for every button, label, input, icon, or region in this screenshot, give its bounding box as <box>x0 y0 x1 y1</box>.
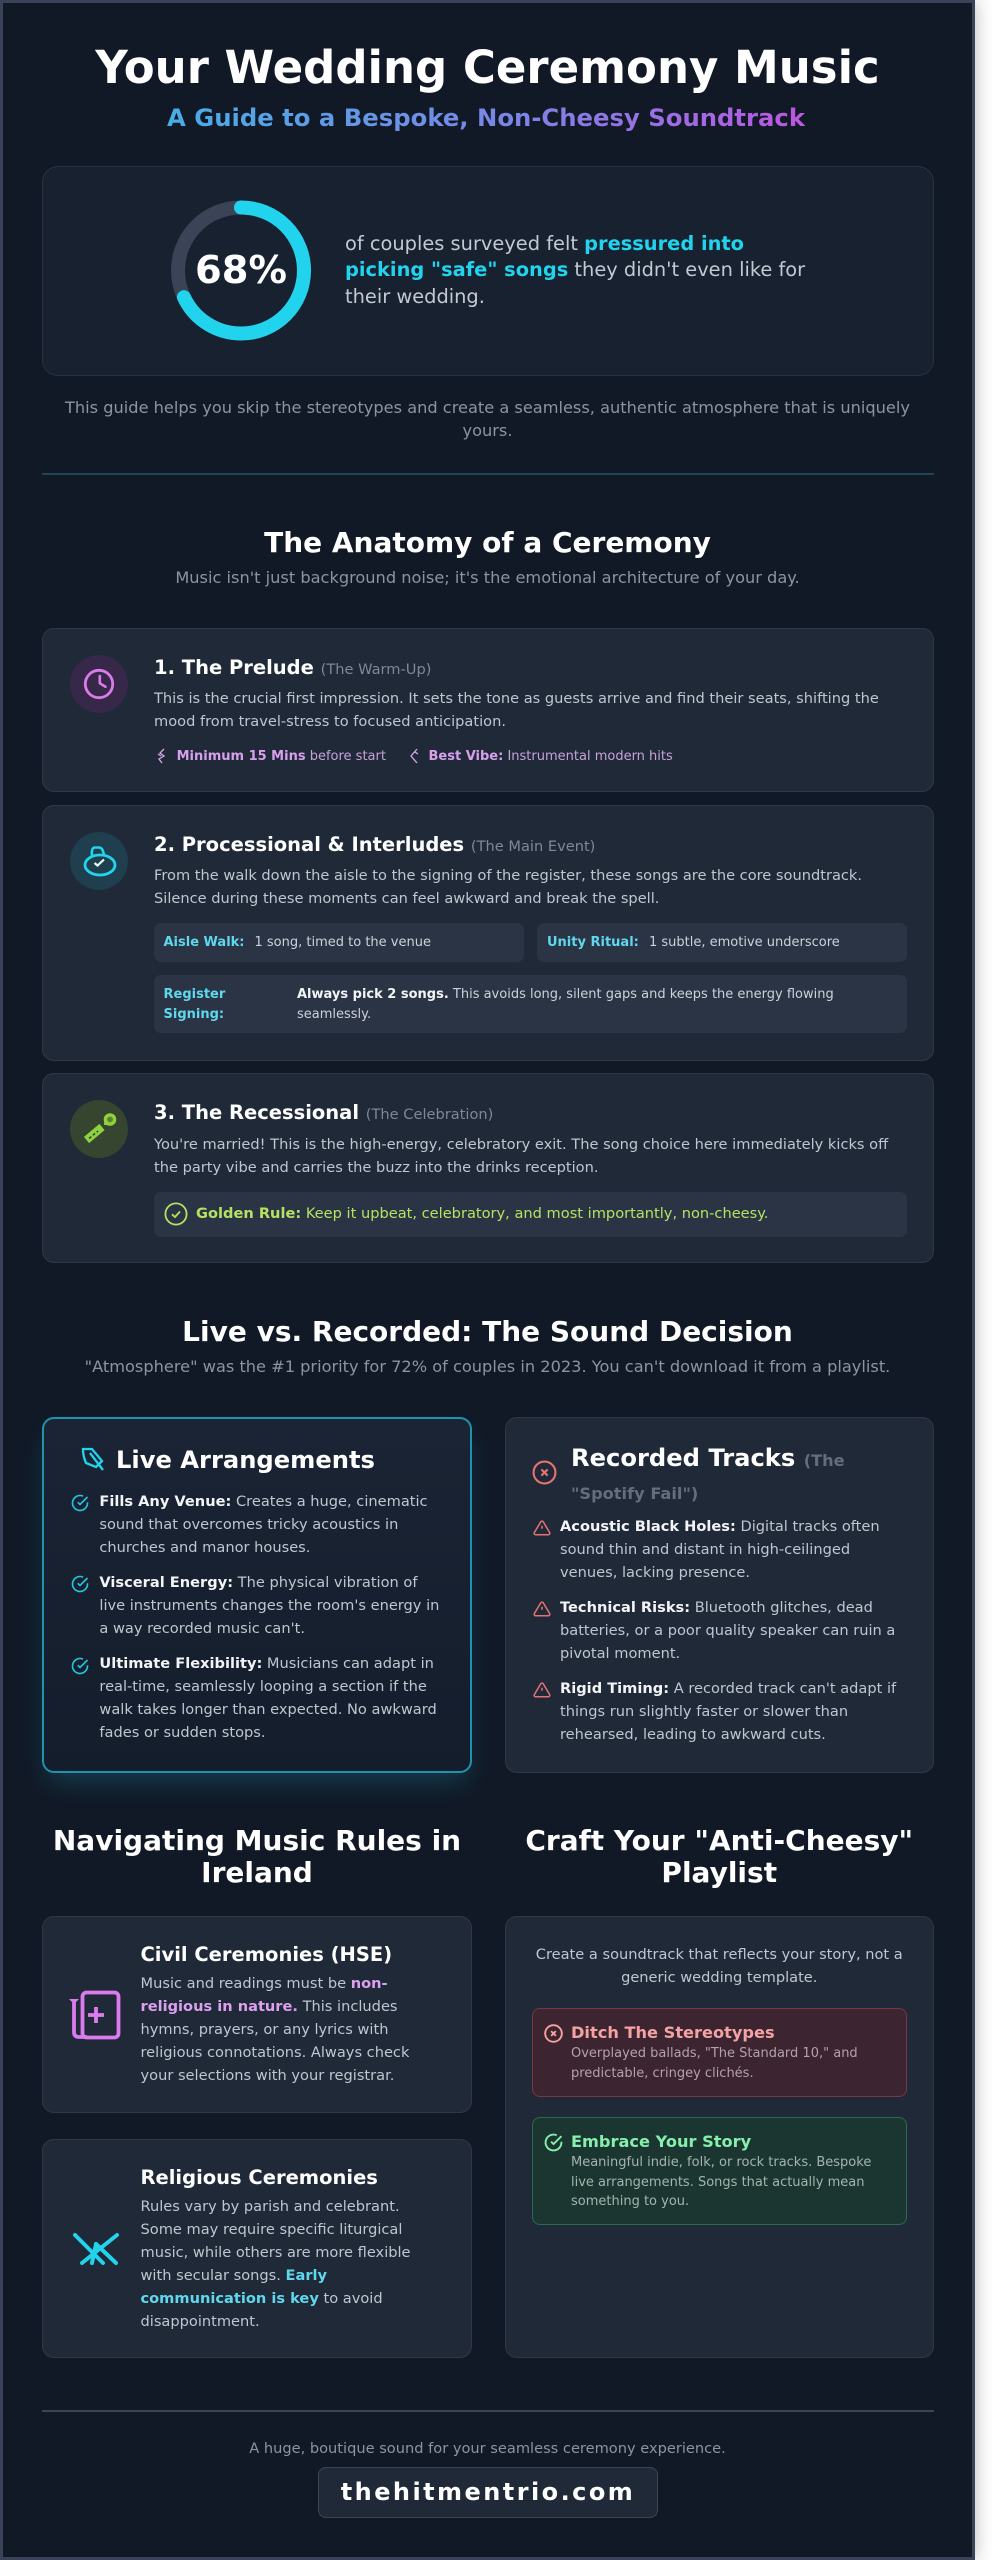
callout: aisle walk: 1 song, timed to the venue <box>254 935 431 950</box>
list item: ultimate flexibility: Ultimate Flexibility: Musicians can adapt in <box>99 1655 434 1672</box>
description: recessional: the party vibe and carries the buzz into the drinks reception. <box>154 1158 598 1176</box>
callout: ditch the stereotypes <box>532 2008 907 2097</box>
list item: ultimate flexibility: walk takes longer than expected. No awkward <box>99 1701 437 1718</box>
statistic text <box>345 232 806 308</box>
callout: golden rule <box>154 1192 906 1237</box>
panel: religious ceremonies <box>42 2139 472 2358</box>
callout: register signing <box>154 975 906 1033</box>
heading: live vs recorded: Live vs. Recorded: The Sound Decision <box>182 1315 793 1348</box>
callout: golden rule: Golden Rule: Keep it upbeat, celebratory, and most importantly, non-cheesy. <box>196 1205 768 1222</box>
list item: visceral energy: Visceral Energy: The physical vibration of <box>99 1574 418 1591</box>
description: religious ceremonies: with secular songs. Early <box>140 2267 327 2284</box>
description: civil ceremonies: your selections with your registrar. <box>140 2067 394 2084</box>
statistic text: of couples surveyed felt pressured into <box>345 232 744 254</box>
callout: unity ritual: 1 subtle, emotive underscore <box>649 935 840 950</box>
panel: anti-cheesy playlist <box>505 1916 934 2358</box>
list item: technical risks: pivotal moment. <box>560 1645 680 1662</box>
subheading: anatomy: Music isn't just background noise; it's the emotional architecture of your day. <box>175 568 800 587</box>
description: recessional: You're married! This is the high-energy, celebratory exit. The song choice here immediately kicks off <box>154 1136 888 1152</box>
panel: civil ceremonies <box>42 1916 472 2113</box>
description: civil ceremonies: hymns, prayers, or any lyrics with <box>140 2021 388 2038</box>
callout: embrace your story: Meaningful indie, folk, or rock tracks. Bespoke <box>571 2155 871 2170</box>
description: religious ceremonies: music, while others are more flexible <box>140 2244 411 2261</box>
heading: recessional: 3. The Recessional (The Celebration) <box>154 1100 493 1124</box>
meta: minimum time <box>158 748 386 764</box>
list item: visceral energy: live instruments changes the room's energy in <box>99 1597 439 1614</box>
list item: ultimate flexibility: fades or sudden stops. <box>99 1724 266 1741</box>
intro text: yours. <box>462 420 512 440</box>
description: processional: From the walk down the aisle to the signing of the register, these songs are the core soundtrack. <box>154 867 862 884</box>
callout: ditch the stereotypes: Ditch The Stereotypes <box>571 2023 775 2042</box>
heading: religious ceremonies: Religious Ceremonies <box>140 2166 378 2189</box>
title: Your Wedding Ceremony Music <box>95 41 880 94</box>
heading: recorded tracks <box>571 1444 845 1503</box>
callout: embrace your story: Embrace Your Story <box>571 2132 751 2151</box>
panel: live arrangements <box>42 1417 472 1773</box>
playlist intro: Create a soundtrack that reflects your story, not a <box>536 1946 903 1962</box>
panel: the prelude: Best Vibe: Instrumental modern hits <box>428 748 673 764</box>
list item: rigid timing: Rigid Timing: A recorded track can't adapt if <box>560 1680 896 1697</box>
list item: rigid timing: rehearsed, leading to awkward cuts. <box>560 1726 826 1743</box>
intro text <box>64 398 910 440</box>
callout: embrace your story <box>532 2117 907 2225</box>
list item: visceral energy <box>72 1574 439 1637</box>
list item: fills any venue: sound that overcomes tricky acoustics in <box>99 1516 398 1532</box>
panel: the prelude: Minimum 15 Mins before start <box>177 748 386 764</box>
footer website badge <box>318 2467 658 2518</box>
statistic text: their wedding. <box>345 285 485 308</box>
callout: ditch the stereotypes: predictable, cringey clichés. <box>571 2066 754 2081</box>
footer tagline: A huge, boutique sound for your seamless ceremony experience. <box>249 2440 726 2457</box>
playlist intro: generic wedding template. <box>621 1968 817 1986</box>
heading: music rules in ireland <box>53 1824 461 1889</box>
panel: the recessional <box>42 1073 934 1263</box>
description: religious ceremonies: Rules vary by parish and celebrant. <box>140 2198 400 2215</box>
list item: technical risks: Technical Risks: Bluetooth glitches, dead <box>560 1599 873 1616</box>
list item: rigid timing <box>533 1680 896 1743</box>
panel: the prelude <box>42 628 934 792</box>
panel: hero statistic <box>42 166 934 376</box>
list item: acoustic black holes <box>533 1518 880 1580</box>
list item: visceral energy: a way recorded music can't. <box>99 1620 305 1637</box>
list item: fills any venue: Fills Any Venue: Creates a huge, cinematic <box>99 1492 428 1510</box>
description: prelude: This is the crucial first impression. It sets the tone as guests arrive and find their seats, shifting the <box>154 690 879 707</box>
callout: embrace your story: live arrangements. Songs that actually mean <box>571 2175 864 2190</box>
heading: anti-cheesy playlist: Playlist <box>661 1856 777 1889</box>
description: recessional <box>154 1136 888 1176</box>
icon: stopwatch <box>70 832 128 890</box>
description: religious ceremonies <box>140 2198 411 2330</box>
statistic text: picking "safe" songs they didn't even like for <box>345 258 805 281</box>
heading: processional: 2. Processional & Interludes (The Main Event) <box>154 832 595 856</box>
callout: aisle walk: Aisle Walk: <box>164 935 245 950</box>
description: processional: Silence during these moments can feel awkward and break the spell. <box>154 890 659 907</box>
heading: music rules in ireland: Ireland <box>201 1856 313 1889</box>
callout: register signing: Register <box>164 987 225 1002</box>
description: prelude <box>154 690 879 730</box>
list item: acoustic black holes: venues, lacking presence. <box>560 1564 750 1580</box>
subheading: live vs recorded: "Atmosphere" was the #1 priority for 72% of couples in 2023. You can't download it from a playlist. <box>85 1357 890 1376</box>
icon: book with plus <box>69 1990 120 2040</box>
meta: best vibe <box>410 748 673 764</box>
icon: clock <box>70 655 128 713</box>
description: religious ceremonies: communication is key to avoid <box>140 2290 383 2307</box>
list item: fills any venue <box>72 1492 428 1556</box>
description: civil ceremonies: religious in nature. This includes <box>140 1998 398 2015</box>
callout: register signing: Always pick 2 songs. This avoids long, silent gaps and keeps the energy flowing <box>297 987 834 1002</box>
panel: processional and interludes <box>42 805 934 1061</box>
callout: register signing: Signing: <box>164 1006 224 1022</box>
description: civil ceremonies: Music and readings must be non- <box>140 1975 388 1992</box>
callout: aisle walk <box>154 923 524 962</box>
heading: anatomy: The Anatomy of a Ceremony <box>264 526 711 559</box>
heading: anti-cheesy playlist <box>525 1824 913 1889</box>
heading: recorded tracks: "Spotify Fail") <box>571 1484 698 1503</box>
subtitle: A Guide to a Bespoke, Non-Cheesy Soundtrack <box>167 103 805 132</box>
intro text: This guide helps you skip the stereotypes and create a seamless, authentic atmosphere that is uniquely <box>65 398 910 416</box>
heading: prelude: 1. The Prelude (The Warm-Up) <box>154 656 431 678</box>
description: civil ceremonies <box>140 1975 410 2084</box>
callout: register signing: seamlessly. <box>297 1006 371 1022</box>
heading: music rules in ireland: Navigating Music Rules in <box>53 1824 461 1857</box>
donut chart: 68% <box>171 200 311 340</box>
icon: microphone <box>70 1100 128 1158</box>
heading: anti-cheesy playlist: Craft Your "Anti-Cheesy" <box>525 1824 913 1857</box>
callout: unity ritual: Unity Ritual: <box>547 935 639 950</box>
footer website badge: thehitmentrio.com <box>341 2478 635 2506</box>
playlist intro <box>536 1946 903 1986</box>
icon: crossed lines <box>72 2232 120 2266</box>
donut chart: 68%: 68% <box>195 248 287 293</box>
description: processional <box>154 867 862 907</box>
list item: acoustic black holes: Acoustic Black Holes: Digital tracks often <box>560 1518 880 1534</box>
icon: feather <box>82 1448 104 1471</box>
list item: rigid timing: things run slightly faster or slower than <box>560 1703 848 1720</box>
callout: embrace your story: something to you. <box>571 2194 689 2209</box>
description: civil ceremonies: religious connotations. Always check <box>140 2044 409 2061</box>
list item: acoustic black holes: sound thin and distant in high-ceilinged <box>560 1540 850 1558</box>
callout: unity ritual <box>537 923 906 962</box>
callout: ditch the stereotypes: Overplayed ballads, "The Standard 10," and <box>571 2046 858 2061</box>
list item: ultimate flexibility <box>72 1655 437 1741</box>
description: prelude: mood from travel-stress to focused anticipation. <box>154 713 506 730</box>
heading: civil ceremonies: Civil Ceremonies (HSE) <box>140 1943 392 1966</box>
panel: recorded tracks <box>505 1417 934 1773</box>
description: religious ceremonies: Some may require specific liturgical <box>140 2221 402 2238</box>
list item: fills any venue: churches and manor houses. <box>99 1538 310 1556</box>
heading: recorded tracks: Recorded Tracks (The <box>571 1444 845 1472</box>
icon: x circle <box>532 1460 556 1484</box>
list item: ultimate flexibility: real-time, seamlessly looping a section if the <box>99 1678 427 1695</box>
description: religious ceremonies: disappointment. <box>140 2313 260 2330</box>
list item: technical risks <box>533 1599 895 1662</box>
list item: technical risks: batteries, or a poor quality speaker can ruin a <box>560 1622 895 1639</box>
heading: live arrangements: Live Arrangements <box>116 1446 375 1474</box>
